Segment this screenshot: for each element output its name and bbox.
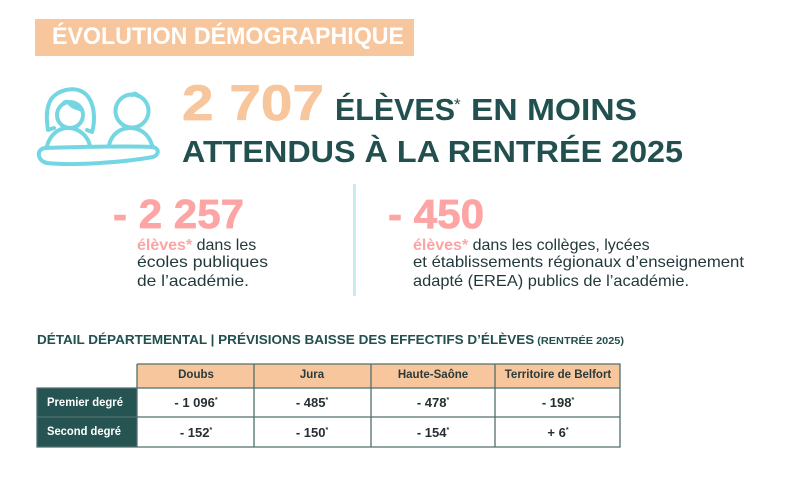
title banner (35, 19, 414, 56)
row: second degré: * (446, 427, 449, 434)
row: second degré: - 150 (296, 425, 325, 440)
row: premier degré: * (446, 397, 449, 404)
statistic: secondary schools: élèves* dans les collèges, lycées (413, 237, 650, 254)
icon: two students at a desk (39, 89, 158, 164)
row: second degré: + 6 (547, 425, 566, 440)
divider (353, 184, 356, 296)
header row: Territoire de Belfort (505, 369, 611, 381)
headline: * (454, 95, 461, 114)
row: premier degré: - 485 (296, 395, 325, 410)
row: premier degré: Premier degré (47, 397, 123, 409)
row: second degré: * (325, 427, 328, 434)
statistic: secondary schools: adapté (EREA) publics de l’académie. (413, 273, 689, 290)
row: second degré: * (566, 427, 569, 434)
row: premier degré: * (215, 397, 218, 404)
header row: Jura (300, 369, 325, 381)
statistic: secondary schools (388, 191, 745, 290)
title banner: ÉVOLUTION DÉMOGRAPHIQUE (52, 22, 404, 50)
statistic: primary schools: élèves* dans les (137, 237, 256, 254)
headline: 2 707 (182, 75, 324, 131)
headline: EN MOINS (471, 92, 637, 127)
header row: Haute-Saône (398, 369, 468, 381)
row: premier degré: * (325, 397, 328, 404)
statistic: primary schools: écoles publiques (137, 254, 268, 271)
row: second degré (37, 417, 569, 447)
headline: ÉLÈVES (335, 92, 455, 127)
headline (182, 75, 683, 169)
headline: ATTENDUS À LA RENTRÉE 2025 (182, 134, 683, 169)
statistic: primary schools: de l’académie. (137, 273, 249, 290)
row: premier degré: - 198 (542, 395, 571, 410)
header row: Doubs (178, 369, 214, 381)
table heading: DÉTAIL DÉPARTEMENTAL | PRÉVISIONS BAISSE DES EFFECTIFS D’ÉLÈVES (RENTRÉE 2025) (37, 332, 624, 347)
header row (137, 364, 620, 388)
row: second degré: - 154 (417, 425, 446, 440)
statistic: secondary schools: et établissements régionaux d’enseignement (413, 254, 745, 271)
row: premier degré: - 478 (417, 395, 446, 410)
statistic: secondary schools: - 450 (388, 191, 484, 237)
row: premier degré: * (571, 397, 574, 404)
statistic: primary schools (113, 191, 268, 290)
row: second degré: * (209, 427, 212, 434)
row: premier degré (37, 388, 574, 417)
row: second degré: Second degré (47, 426, 121, 438)
row: second degré: - 152 (180, 425, 209, 440)
table: departmental forecast (37, 364, 620, 447)
row: premier degré: - 1 096 (174, 395, 215, 410)
statistic: primary schools: - 2 257 (113, 191, 244, 237)
